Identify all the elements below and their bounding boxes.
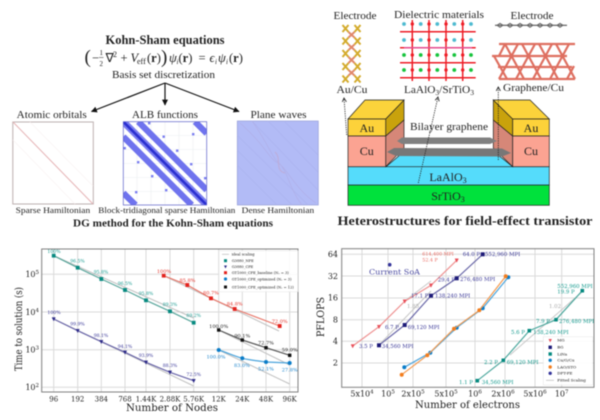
x axis labels: 5.76K (183, 396, 205, 404)
x axis labels: 48K (259, 396, 274, 404)
label: Graphene/Cu: Graphene/Cu (503, 83, 565, 94)
structure: graphene/Cu lattice (492, 23, 575, 79)
series: G3880 CPE: 94.1% (118, 344, 133, 350)
chart: weak scaling PFLOPS (316, 249, 594, 411)
x axis labels: 5 (421, 390, 425, 396)
label: block-tridiagonal sparse Hamiltonian: Block-tridiagonal sparse Hamiltonian (98, 206, 235, 215)
y axis labels: 4 (36, 308, 40, 314)
x axis labels: 4 (370, 390, 374, 396)
electrode: left (348, 100, 404, 167)
panel: ALB functions (98, 109, 235, 215)
y axis labels: 5 (36, 270, 40, 276)
x axis labels: 7 (565, 390, 569, 396)
series: LaNa: 7.9 P (536, 319, 550, 325)
series: GT1000 CPE baseline: 72.0% (272, 319, 288, 325)
legend: GT1000_CPE_optimized (Nₑ = 12) (232, 285, 294, 289)
series: MG: 614,400 MPI (422, 252, 454, 258)
series: GT1000 CPE optimized Ne=3: 27.8% (282, 368, 298, 374)
panel: crystal structures (334, 10, 575, 97)
electrode: right: Au (524, 121, 538, 135)
series: LaNa: 2.2 P (484, 360, 498, 366)
series: GT1000 CPE baseline: 85.8% (180, 278, 196, 284)
series: GT1000 CPE optimized Ne=12: 90.1% (234, 334, 250, 340)
x axis labels: 6 (478, 390, 482, 396)
equation: ψ (218, 51, 226, 65)
x axis labels: 2x10 (491, 390, 511, 398)
annotation: slopes (407, 304, 561, 310)
label: LaAlO3/SrTiO3: /SrTiO (439, 85, 471, 96)
x axis labels: 2x10 (401, 390, 421, 398)
grid (342, 249, 594, 387)
series: G3880 NPE (47, 249, 202, 324)
label: dielectric materials: Dielectric materials (394, 10, 484, 21)
fitted scaling lines (379, 281, 582, 355)
structure: LaAlO3/SrTiO3 lattice (400, 20, 476, 81)
series: G3880 CPE: 88.3% (163, 363, 178, 369)
series: G3880 NPE: 100% (47, 249, 61, 255)
panel: atomic orbitals (13, 109, 93, 215)
y axis labels: 64 (328, 250, 338, 259)
label: bilayer graphene: Bilayer graphene (410, 122, 488, 133)
series: G3880 CPE: 99.9% (70, 322, 85, 328)
series: BG: 29.4 P (438, 278, 455, 284)
y axis labels: 10 (25, 346, 36, 354)
series: BG: 69,120 MPI (408, 325, 440, 331)
y axis labels: 16 (328, 294, 338, 303)
equation: V (130, 51, 140, 65)
x axis labels: 24K (235, 396, 250, 404)
x axis title: Number of electrons (415, 399, 520, 411)
equation: ( (84, 47, 91, 68)
equation: (r) (178, 51, 192, 65)
x axis labels: 12K (212, 396, 227, 404)
series: BG: 17.1 P (411, 294, 429, 300)
grid (42, 249, 298, 392)
legend: ideal scaling (232, 253, 255, 257)
x axis labels: 192 (71, 396, 84, 404)
legend (219, 251, 298, 292)
arrows: basis branches (92, 83, 239, 112)
legend: GT1000_CPE_baseline (Nₑ = 3) (232, 271, 289, 275)
series: BG: 6.7 P (385, 325, 399, 331)
equation: + (120, 51, 128, 65)
series: LaNa: 19.9 P (557, 290, 575, 296)
x axis labels: 1.44K (136, 396, 157, 404)
panel: Kohn-Sham equations (84, 32, 243, 81)
y axis labels: 10 (25, 308, 36, 317)
label: atomic orbitals: Atomic orbitals (17, 109, 87, 121)
series: GT1000 CPE optimized Ne=12 (209, 324, 298, 357)
legend: Cu/G/Cu (557, 358, 575, 363)
matrix: sparse Hamiltonian (13, 122, 93, 204)
legend: BG (557, 345, 564, 350)
series: BG: 138,240 MPI (435, 294, 470, 300)
series: GT1000 CPE optimized Ne=3: 83.0% (234, 363, 250, 369)
x axis labels: 2.88K (160, 396, 181, 404)
x axis labels: 96 (49, 396, 59, 404)
series: G3880 NPE: 95.8% (94, 270, 109, 276)
x axis labels: 96K (283, 396, 298, 404)
y axis labels: 10 (25, 270, 36, 279)
x axis labels: 5x10 (523, 390, 543, 398)
y axis labels: 2 (333, 359, 338, 368)
equation: i (176, 58, 178, 66)
panel: device schematic (348, 100, 549, 205)
series: GT1000 CPE optimized Ne=12: 59.0% (282, 348, 298, 354)
equation: ψ (169, 51, 177, 65)
annotation: current SoA (369, 263, 421, 276)
equation: = (198, 51, 206, 65)
electrode: left: Au (359, 121, 374, 135)
series: G3880 CPE: 100% (47, 310, 61, 316)
x axis title: Number of Nodes (126, 402, 218, 414)
x axis labels: 768 (118, 396, 132, 404)
x axis labels: 6 (511, 390, 515, 396)
x axis labels: 10 (468, 390, 478, 398)
text: basis set discretization: Basis set discretization (112, 69, 216, 81)
equation: (r) (147, 51, 161, 65)
series: LAO/STO (400, 274, 508, 377)
legend: Fitted Scaling (557, 378, 586, 383)
legend: G3880_CPE (232, 265, 254, 269)
y axis labels: 2 (36, 383, 39, 389)
equation: i (215, 58, 217, 66)
series: Cu/G/Cu (402, 275, 510, 369)
x axis labels: 10 (381, 390, 391, 398)
layer: SrTiO3: 3 (461, 195, 465, 204)
annotation: current SoA: Current SoA (369, 268, 421, 276)
bilayer graphene sheets (387, 138, 511, 156)
y axis labels: 32 (328, 272, 338, 281)
x axis labels (350, 390, 569, 398)
series: LaNa: 34,560 MPI (482, 380, 514, 386)
label: Au/Cu: Au/Cu (336, 85, 368, 96)
series: G3880 CPE: 98.1% (94, 333, 109, 339)
series: G3880 NPE: 89.2% (186, 313, 202, 319)
y axis labels: 8 (333, 316, 338, 324)
equation: eff (137, 57, 146, 66)
series: GT1000 CPE optimized Ne=12: 72.7% (258, 340, 274, 346)
arrows: dashed callouts (344, 87, 498, 183)
series: G3880 NPE: 89.3% (163, 302, 178, 308)
equation: 1 (100, 49, 104, 57)
series: LaNa: 5.6 P (511, 330, 525, 336)
label: LaAlO3/SrTiO3: LaAlO (404, 85, 433, 96)
x axis labels: 5x10 (434, 390, 454, 398)
y axis labels: 10 (25, 383, 36, 392)
legend: LAO/STO (557, 364, 577, 369)
x axis labels: 5 (391, 390, 395, 396)
x axis labels: 6 (543, 390, 547, 396)
series: GT1000 CPE baseline: 80.7% (203, 290, 219, 296)
series: GT1000 CPE baseline: 84.8% (227, 302, 243, 308)
label: ALB functions: ALB functions (132, 109, 198, 121)
x axis labels (49, 396, 298, 404)
label: plane waves: Plane waves (250, 109, 306, 121)
matrix: dense Hamiltonian (237, 121, 318, 205)
series: GT1000 CPE baseline (157, 269, 288, 328)
series: G3880 CPE (47, 310, 202, 383)
series: GT1000 CPE optimized Ne=3 (206, 348, 298, 374)
x axis labels: 5 (454, 390, 458, 396)
series: BG: 552,960 MPI (485, 252, 520, 258)
heading: heterostructures: Heterostructures for field-effect transistor (338, 214, 593, 228)
label: electrode left: Electrode (334, 11, 377, 22)
y axis labels: 4 (333, 337, 338, 346)
equation: 2 (113, 50, 117, 59)
y axis labels: 3 (36, 346, 40, 352)
layer: SrTiO3: SrTiO (431, 189, 461, 203)
label: LaAlO3/SrTiO3: 3 (435, 89, 440, 97)
legend: GT1000_CPE_optimized (Nₑ = 3) (232, 277, 292, 281)
series: LaNa: 69,120 MPI (507, 360, 539, 366)
legend (543, 337, 593, 385)
series: GT1000 CPE optimized Ne=12: 100.0% (209, 324, 228, 330)
y axis title: PFLOPS (316, 297, 327, 337)
y axis title: Time to solution (s) (14, 287, 25, 371)
series: BG: 276,480 MPI (460, 277, 495, 283)
equation (84, 47, 243, 68)
x axis labels: 5x10 (350, 390, 370, 398)
matrix: block-tridiagonal (123, 122, 207, 205)
layer: LaAlO3 (348, 155, 549, 185)
label: dense Hamiltonian: Dense Hamiltonian (242, 206, 314, 215)
layer: LaAlO3: LaAlO (429, 170, 463, 184)
heading: DG method: DG method for the Kohn-Sham equations (73, 218, 273, 230)
equation: ) (161, 47, 167, 68)
x axis labels: 10 (555, 390, 565, 398)
series: LaNa: 1.1 P (459, 380, 473, 386)
ideal scaling lines (54, 256, 290, 386)
series: LaNa: 276,480 MPI (559, 319, 594, 325)
annotation: slopes: 1.85 (407, 304, 420, 310)
series: BG (359, 252, 520, 350)
label: electrode right: Electrode (510, 11, 554, 22)
electrode: left: Cu (360, 144, 374, 158)
series: GT1000 CPE optimized Ne=3: 52.1% (258, 366, 274, 372)
structure: Au/Cu lattice (342, 25, 360, 82)
series: BG: 3.5 P (359, 344, 373, 350)
equation: i (226, 58, 228, 66)
series: MG: 52.4 P (422, 258, 439, 264)
series: G3880 NPE: 95.8% (139, 291, 154, 297)
series: LaNa (459, 284, 594, 386)
series: G3880 CPE: 72.5% (186, 372, 202, 378)
series: GT1000 CPE optimized Ne=3: 100.0% (206, 354, 226, 360)
legend: LiNa (557, 351, 568, 356)
label: sparse Hamiltonian: Sparse Hamiltonian (16, 206, 90, 215)
x axis labels: 384 (95, 396, 109, 404)
equation: (r) (229, 51, 243, 65)
series: LaNa: 552,960 MPI (557, 284, 593, 290)
series: BG: 64.0 P (463, 252, 480, 258)
y axis labels (25, 270, 40, 392)
equation: − (92, 51, 99, 65)
label: LaAlO3/SrTiO3: 3 (470, 89, 475, 97)
panel: plane waves (237, 109, 318, 215)
heading: Kohn-Sham equations: Kohn-Sham equations (106, 32, 224, 47)
y axis labels (328, 250, 338, 368)
legend: MG (557, 338, 565, 343)
equation: ϵ (210, 51, 216, 65)
series: GT1000 CPE baseline: 100% (157, 269, 171, 275)
layer: LaAlO3: 3 (463, 176, 467, 185)
series: G3880 CPE: 93.9% (139, 353, 154, 359)
equation: 2 (100, 60, 104, 68)
chart: strong scaling time to solution (14, 249, 298, 414)
layer: SrTiO3 (348, 185, 549, 205)
electrode: right: Cu (524, 144, 538, 158)
annotation: slopes: 1.02 (549, 304, 561, 310)
equation: ∇ (104, 51, 114, 65)
series: G3880 NPE: 96.5% (118, 281, 133, 287)
series: LaNa: 138,240 MPI (533, 330, 569, 336)
electrode: right (493, 100, 549, 167)
series: MG (351, 252, 458, 348)
series: BG: 34,560 MPI (382, 344, 414, 350)
series: G3880 NPE: 96.5% (70, 258, 85, 264)
legend: DFT-FE (557, 371, 573, 376)
legend: G3880_NPE (232, 259, 254, 263)
